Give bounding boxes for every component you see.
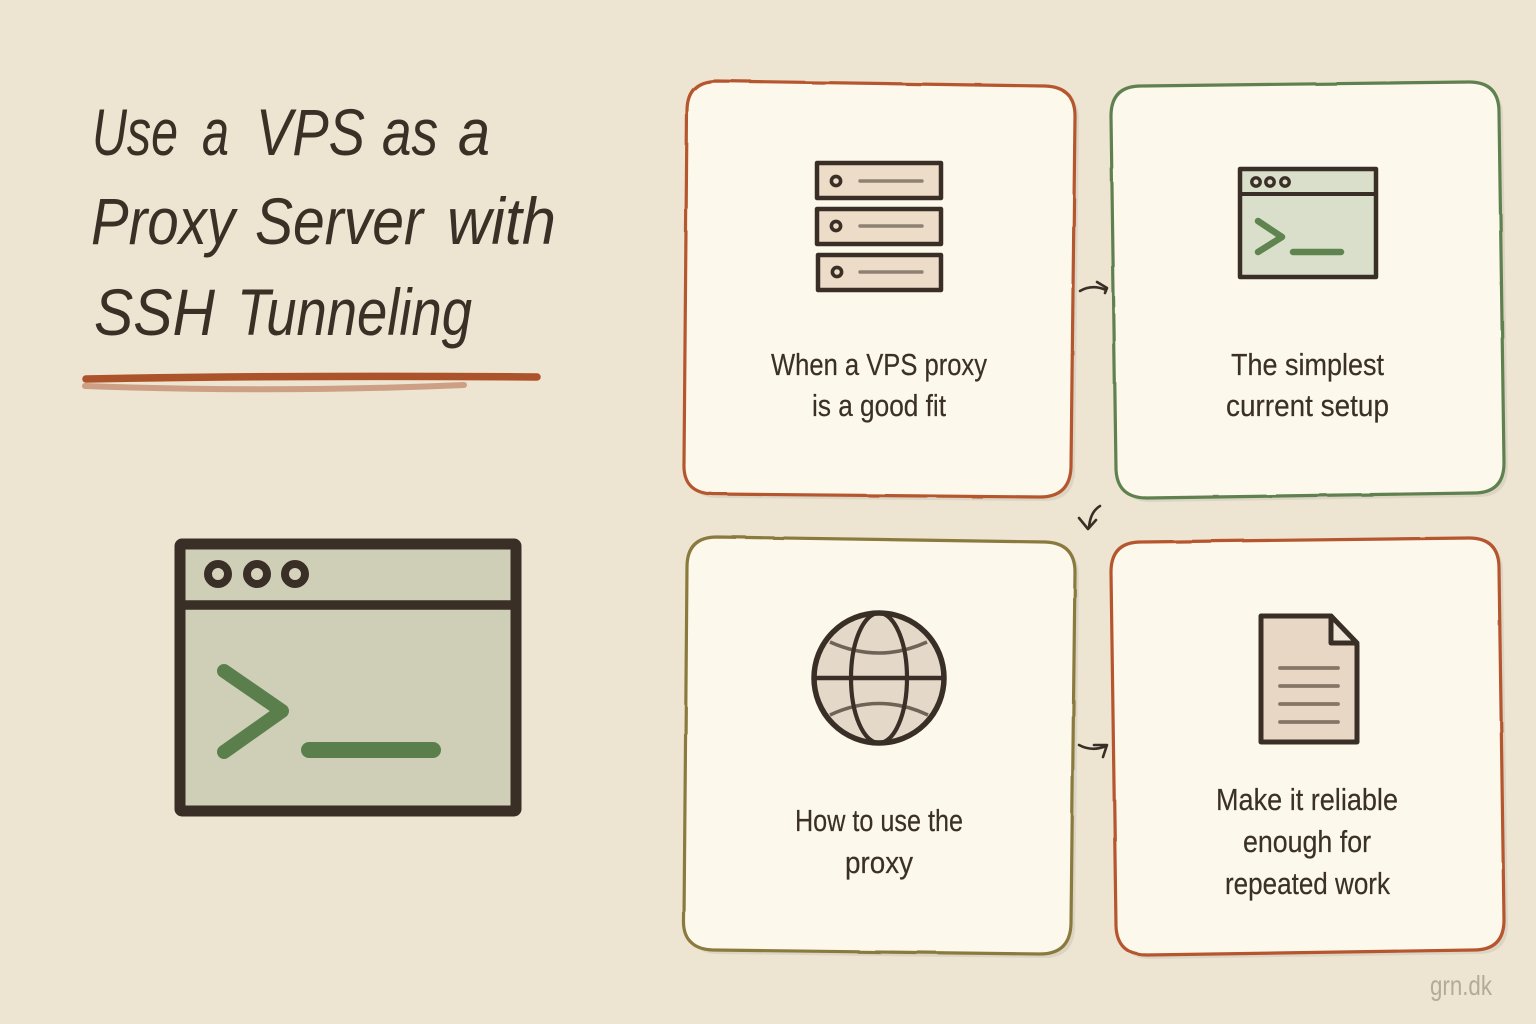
arrow: second to third card [1079, 506, 1100, 529]
card label: enough for [1243, 824, 1371, 859]
card label [795, 803, 963, 880]
card label: How to use the [795, 803, 963, 838]
title [91, 95, 556, 349]
panel: how to use the proxy [684, 537, 1079, 958]
card label: Make it reliable [1216, 782, 1398, 817]
card label: is a good fit [812, 388, 946, 423]
title: Tunneling [237, 275, 472, 349]
title: Use [92, 95, 178, 169]
icon: small terminal window [1240, 169, 1376, 277]
card label [1226, 347, 1389, 423]
card label: When a VPS proxy [771, 347, 987, 382]
arrow: first to second card [1080, 282, 1107, 293]
card label: repeated work [1225, 866, 1390, 901]
title: a [202, 95, 229, 169]
panel: make it reliable [1111, 538, 1508, 959]
card label: The simplest [1231, 347, 1384, 382]
title: VPS [256, 95, 365, 169]
card label [1216, 782, 1398, 901]
arrow: third to fourth card [1079, 745, 1107, 757]
title: as [382, 95, 438, 169]
title: Proxy [91, 184, 238, 258]
card label [771, 347, 987, 423]
title underline [85, 376, 537, 389]
title: with [447, 184, 556, 258]
icon: large terminal window [180, 544, 516, 811]
icon: document [1261, 616, 1357, 742]
panel: the simplest current setup [1111, 82, 1508, 502]
title: SSH [94, 275, 215, 349]
card label: proxy [845, 845, 913, 880]
watermark: grn.dk [1430, 970, 1493, 1001]
panel: when a VPS proxy is a good fit [684, 81, 1079, 501]
card label: current setup [1226, 388, 1389, 423]
title: a [458, 95, 490, 169]
title: Server [255, 184, 426, 258]
icon: globe [814, 613, 944, 743]
icon: server stack [817, 163, 941, 290]
